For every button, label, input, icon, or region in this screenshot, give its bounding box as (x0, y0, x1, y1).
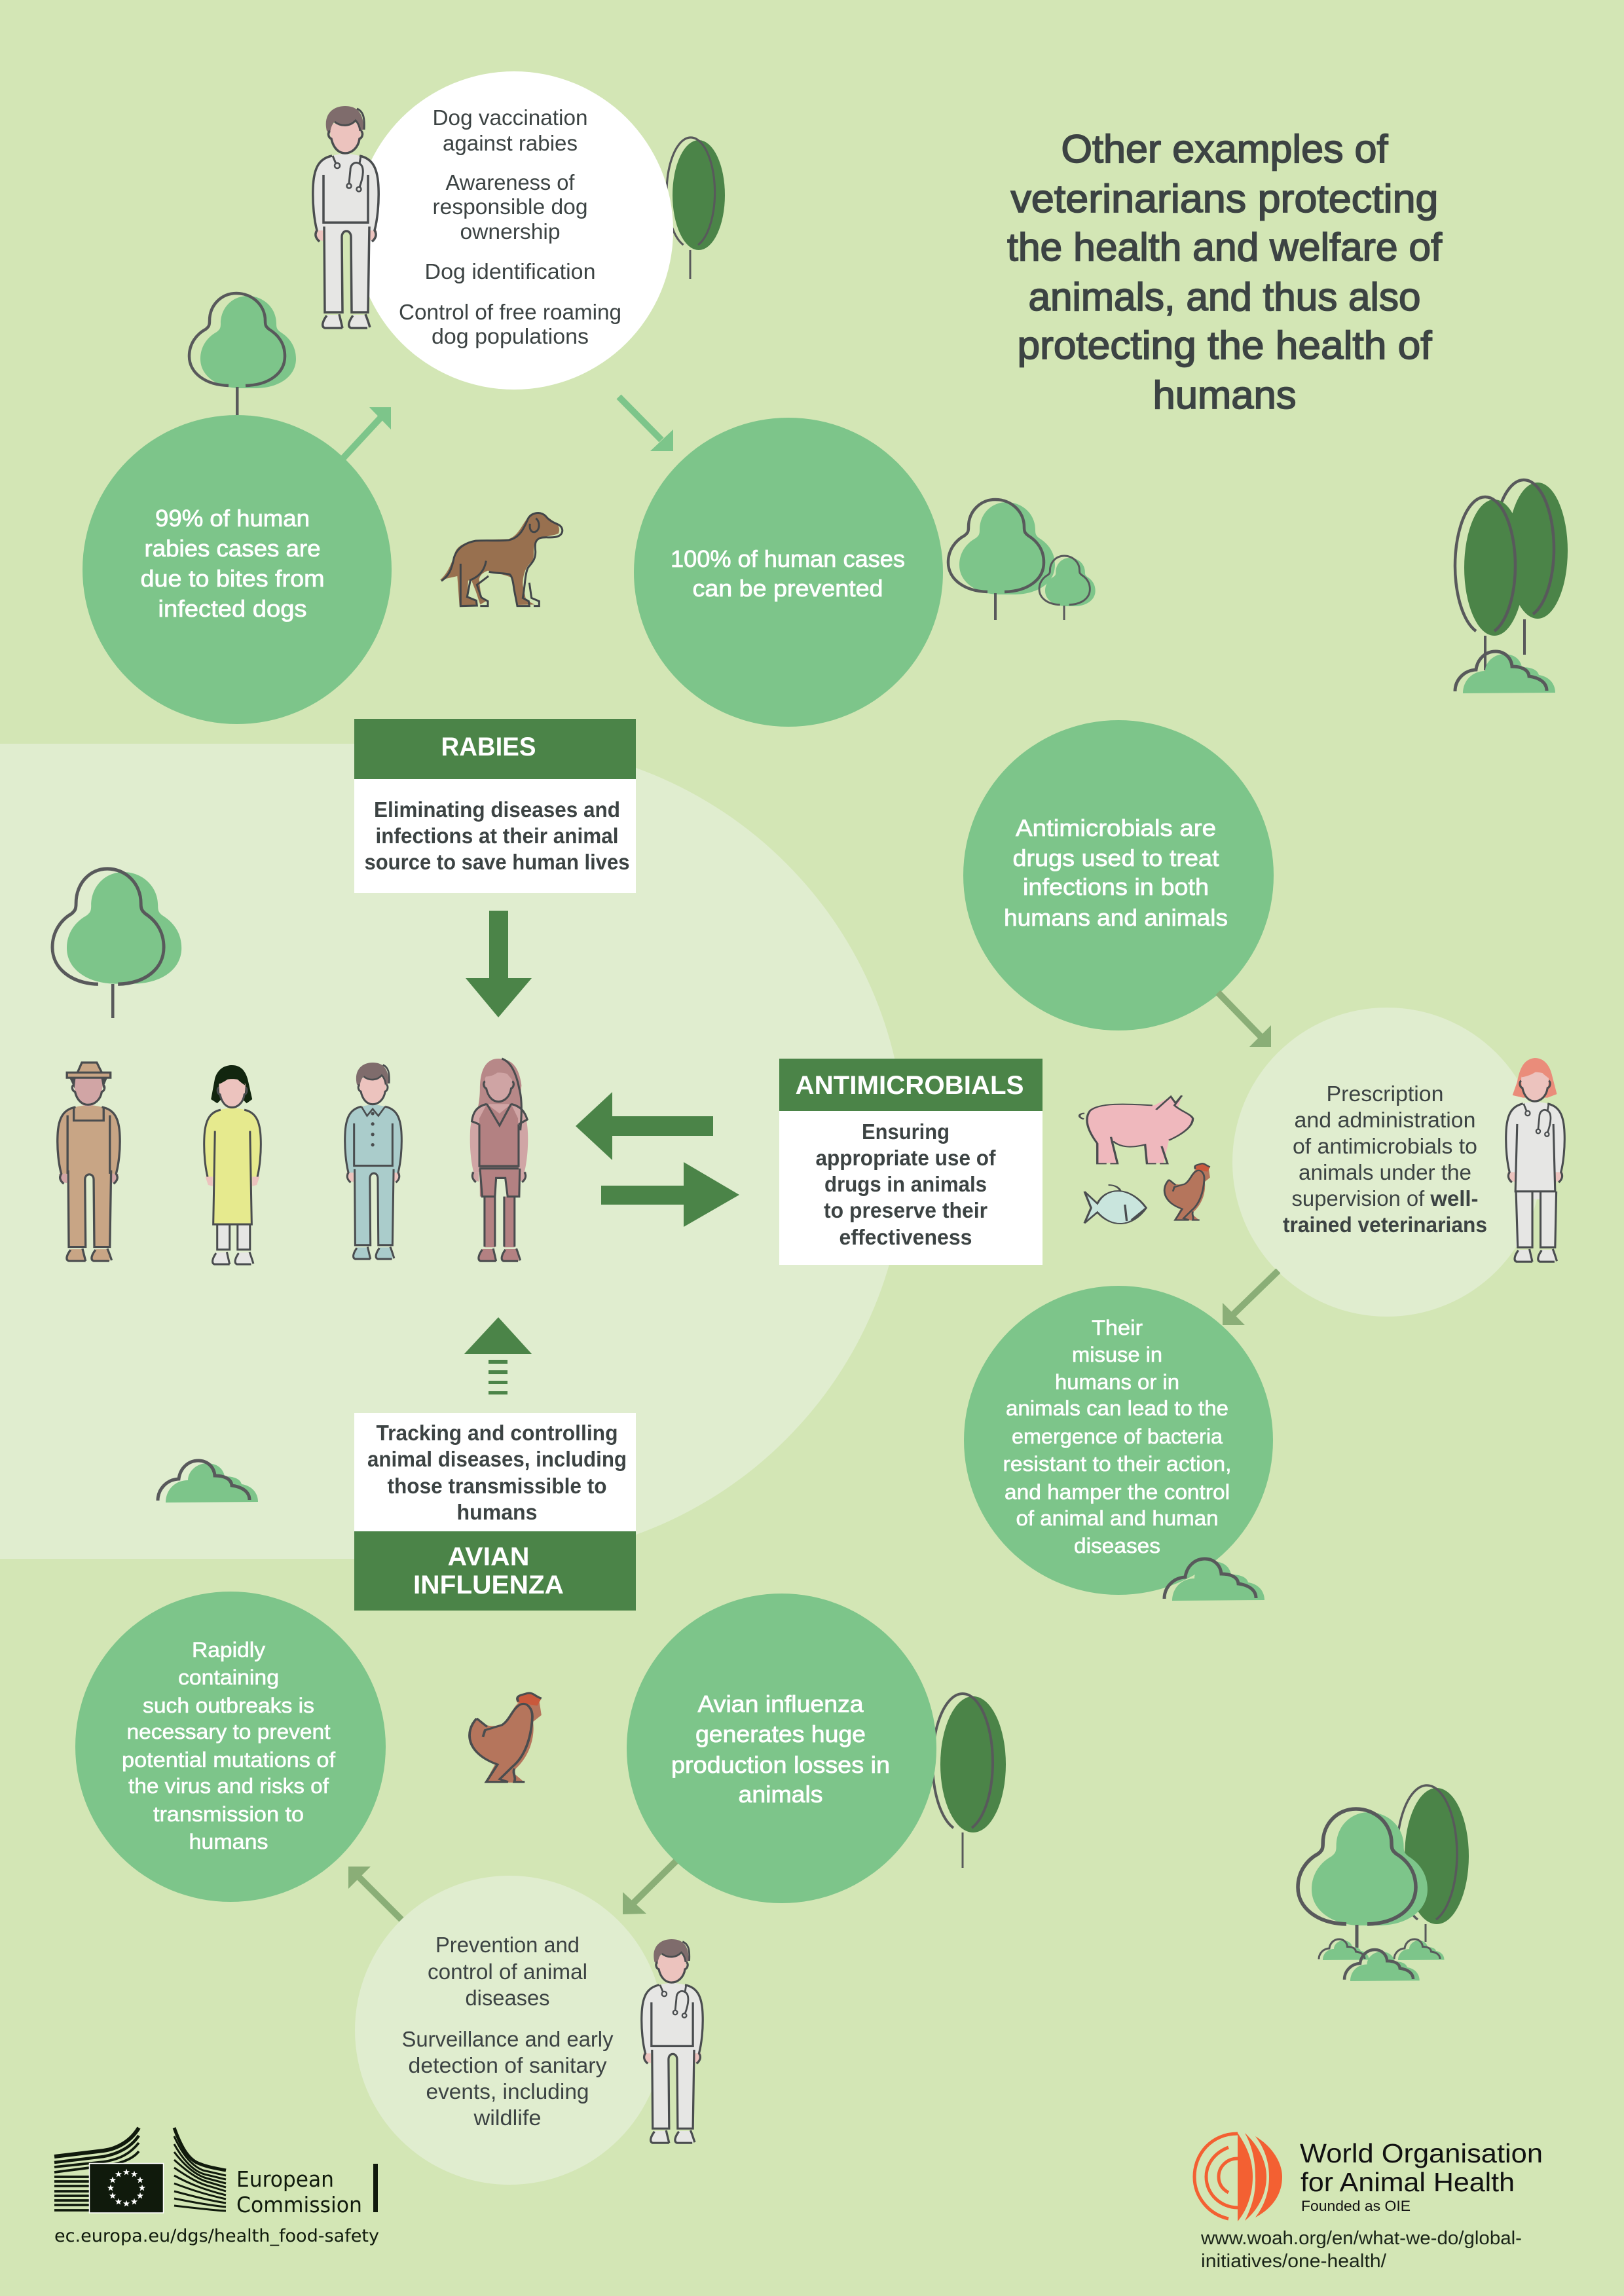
panel: 99% of human rabies cases (83, 415, 392, 724)
panel: 99% of human rabies cases: rabies cases are (144, 535, 321, 562)
arrow: up towards people, dashed (464, 1317, 532, 1394)
title: the health and welfare of (1007, 225, 1442, 269)
icon: veterinarian man top (313, 106, 378, 328)
logo: World Organisation for Animal Health (1194, 2133, 1543, 2272)
logo: World Organisation for Animal Health: Founded as OIE (1301, 2198, 1411, 2214)
icon: veterinarian man bottom (642, 1939, 703, 2143)
panel: prevention and surveillance: control of animal (428, 1959, 587, 1984)
panel: rapidly containing outbreaks: such outbreaks is (143, 1694, 314, 1717)
heading box: rabies: source to save human lives (364, 850, 630, 874)
arrow: 99% circle to white circle (342, 407, 391, 460)
panel: antimicrobials are drugs: Antimicrobials are (1016, 814, 1216, 841)
heading box: avian influenza: animal diseases, including (367, 1447, 627, 1471)
icon: woman in yellow dress (204, 1065, 261, 1264)
icon: tree group bottom right (1298, 1785, 1469, 1981)
logo: European Commission: European (236, 2166, 334, 2192)
icon: man in teal outfit (345, 1063, 401, 1259)
panel: 99% of human rabies cases: due to bites from (140, 565, 325, 592)
arrow: down to people (466, 911, 532, 1017)
panel: prevention and surveillance: events, including (426, 2079, 589, 2104)
heading box: antimicrobials: drugs in animals (824, 1172, 987, 1196)
panel: misuse: resistant to their action, (1003, 1452, 1231, 1476)
panel: avian influenza production losses (627, 1594, 936, 1903)
logo: European Commission (54, 2128, 379, 2246)
panel: 99% of human rabies cases: infected dogs (158, 595, 306, 622)
title: humans (1153, 373, 1297, 417)
title (1007, 127, 1442, 417)
logo: European Commission: ec.europa.eu/dgs/health_food-safety (54, 2226, 379, 2246)
heading box: antimicrobials: ANTIMICROBIALS (795, 1071, 1024, 1100)
arrow: prescription to misuse (1223, 1271, 1278, 1325)
panel: misuse: humans or in (1055, 1370, 1179, 1394)
icon: fish (1084, 1185, 1146, 1224)
panel: antimicrobials are drugs: humans and animals (1004, 904, 1228, 931)
title: Other examples of (1061, 127, 1388, 171)
panel: misuse: Their (1092, 1316, 1143, 1339)
panel: avian influenza production losses: production losses in (671, 1751, 890, 1778)
panel: dog rabies measures: responsible dog (432, 194, 588, 219)
logo: European Commission: Commission (236, 2192, 362, 2217)
panel: prescription by veterinarians: and administration (1294, 1108, 1476, 1132)
panel: misuse: diseases (1074, 1534, 1160, 1558)
panel: prevention and surveillance: detection of sanitary (409, 2053, 607, 2077)
icon: woman with long hair (470, 1059, 528, 1261)
icon: bush near misuse circle (1164, 1559, 1264, 1601)
panel: 99% of human rabies cases: 99% of human (155, 505, 310, 532)
heading box: antimicrobials: to preserve their (824, 1198, 987, 1222)
heading box: avian influenza: INFLUENZA (413, 1571, 564, 1599)
logo: World Organisation for Animal Health: World Organisation (1300, 2138, 1543, 2168)
panel: prevention and surveillance (355, 1876, 664, 2185)
panel: dog rabies measures: Awareness of (445, 170, 575, 194)
panel: dog rabies measures: against rabies (443, 131, 578, 155)
panel: rapidly containing outbreaks: humans (189, 1830, 268, 1853)
arrow: white circle to 100% circle (619, 397, 673, 451)
panel: rapidly containing outbreaks: potential mutations of (122, 1748, 335, 1772)
icon: pair of round trees (948, 500, 1096, 620)
icon: chicken (469, 1692, 542, 1783)
panel: dog rabies measures: dog populations (432, 324, 589, 348)
icon: small chicken (1164, 1163, 1210, 1220)
logo: World Organisation for Animal Health: www.woah.org/en/what-we-do/global- (1200, 2228, 1522, 2249)
panel: prevention and surveillance: Prevention and (435, 1933, 580, 1957)
panel: avian influenza production losses: animals (739, 1781, 822, 1808)
arrow: right towards antimicrobials (601, 1162, 739, 1227)
heading box: avian influenza: those transmissible to (388, 1474, 606, 1498)
panel: misuse: of animal and human (1016, 1506, 1218, 1530)
heading box: avian influenza: humans (457, 1500, 537, 1524)
title: veterinarians protecting (1011, 177, 1438, 221)
panel: misuse: emergence of bacteria (1012, 1425, 1223, 1448)
panel: dog rabies measures: Dog identification (424, 259, 596, 283)
heading box: avian influenza: AVIAN (448, 1542, 529, 1571)
icon: round tree left (52, 869, 181, 1018)
icon: tree near white circle (667, 137, 725, 279)
panel: dog rabies measures: Control of free roaming (399, 300, 621, 324)
heading box: rabies: RABIES (441, 733, 536, 761)
heading box: antimicrobials (779, 1059, 1043, 1265)
arrow: antimicrobials to prescription (1218, 993, 1271, 1047)
panel: prevention and surveillance: wildlife (473, 2105, 541, 2130)
panel: misuse: misuse in (1072, 1343, 1162, 1366)
panel: misuse: animals can lead to the (1006, 1396, 1228, 1420)
panel: avian influenza production losses: generates huge (695, 1721, 866, 1747)
icon: bush left (158, 1461, 258, 1503)
icon: tree near avian circle (932, 1694, 1006, 1868)
panel: prescription by veterinarians (1232, 1008, 1541, 1317)
heading box: rabies: infections at their animal (376, 824, 618, 848)
icon: pig (1080, 1095, 1193, 1163)
logo: World Organisation for Animal Health: initiatives/one-health/ (1201, 2251, 1387, 2272)
panel: misuse: and hamper the control (1005, 1480, 1230, 1504)
panel: rapidly containing outbreaks (75, 1592, 386, 1902)
title: animals, and thus also (1028, 275, 1421, 319)
panel: rapidly containing outbreaks: containing (178, 1666, 279, 1689)
icon: farmer (58, 1063, 120, 1261)
panel: prevention and surveillance: diseases (465, 1986, 550, 2010)
icon: veterinarian woman (1506, 1058, 1564, 1262)
arrow: left towards people (576, 1092, 713, 1160)
panel: misuse (964, 1286, 1273, 1595)
heading box: rabies (354, 719, 636, 893)
panel: 100% of human cases can be prevented: can be prevented (693, 575, 883, 602)
panel: rapidly containing outbreaks: the virus and risks of (128, 1774, 329, 1798)
panel: 100% of human cases can be prevented (634, 418, 943, 727)
panel: rapidly containing outbreaks: transmission to (153, 1802, 304, 1826)
panel: dog rabies measures: Dog vaccination (432, 105, 588, 130)
heading box: antimicrobials: effectiveness (840, 1225, 972, 1249)
arrow: prevention to rapidly containing (348, 1867, 401, 1920)
heading box: rabies: Eliminating diseases and (374, 797, 620, 822)
heading box: antimicrobials: appropriate use of (816, 1146, 996, 1170)
panel: prescription by veterinarians: trained veterinarians (1283, 1212, 1487, 1237)
logo: World Organisation for Animal Health: for Animal Health (1301, 2167, 1515, 2197)
panel: dog rabies measures (355, 71, 673, 390)
panel: prescription by veterinarians: Prescription (1327, 1082, 1443, 1106)
panel: prescription by veterinarians: supervision of well- (1291, 1186, 1479, 1211)
panel: 100% of human cases can be prevented: 100% of human cases (671, 545, 905, 572)
panel: antimicrobials are drugs: infections in both (1023, 873, 1209, 900)
panel: avian influenza production losses: Avian influenza (698, 1690, 864, 1717)
heading box: avian influenza (354, 1413, 636, 1611)
panel: prevention and surveillance: Surveillance and early (402, 2027, 614, 2051)
icon: dog (440, 513, 563, 606)
arrow: avian circle to prevention (623, 1861, 676, 1914)
icon: tree above 99% circle (189, 293, 296, 416)
panel: antimicrobials are drugs (963, 720, 1274, 1030)
icon: tall trees with bush (1455, 480, 1568, 693)
heading box: avian influenza: Tracking and controlling (376, 1421, 618, 1445)
title: protecting the health of (1018, 323, 1432, 367)
panel: antimicrobials are drugs: drugs used to treat (1012, 845, 1219, 871)
pale central area (0, 744, 905, 1559)
heading box: antimicrobials: Ensuring (862, 1120, 950, 1144)
panel: rapidly containing outbreaks: Rapidly (192, 1638, 265, 1662)
panel: prescription by veterinarians: animals under the (1299, 1160, 1471, 1184)
panel: rapidly containing outbreaks: necessary to prevent (127, 1720, 331, 1743)
panel: dog rabies measures: ownership (460, 219, 561, 244)
panel: prescription by veterinarians: of antimicrobials to (1293, 1134, 1477, 1158)
